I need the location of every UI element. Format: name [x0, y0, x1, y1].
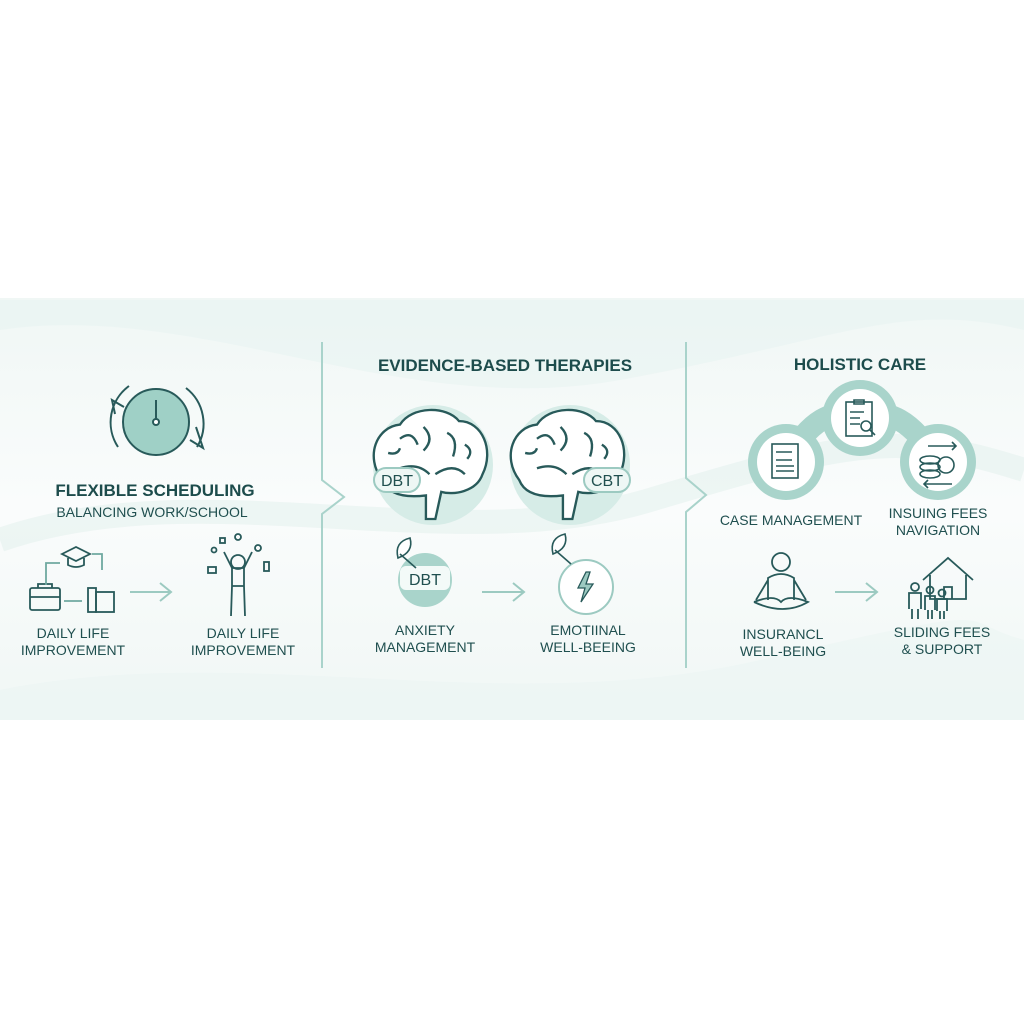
- arrow: [482, 583, 524, 601]
- label insuing fees: [889, 505, 987, 538]
- label anxiety: MANAGEMENT: [375, 639, 475, 655]
- arrow: [130, 583, 171, 601]
- arrow: [835, 583, 877, 601]
- icon: clock: [29, 385, 270, 616]
- label left: [21, 625, 125, 658]
- label insurancl: WELL-BEING: [740, 643, 826, 659]
- label right: IMPROVEMENT: [191, 642, 295, 658]
- label insuing fees: INSUING FEES: [889, 505, 987, 521]
- panel: evidence-based therapies: DBT: [409, 572, 441, 589]
- label emotional: [540, 622, 636, 655]
- label emotional: EMOTIINAL: [550, 622, 626, 638]
- icon: connected circles: [786, 414, 938, 462]
- panel: flexible scheduling: [21, 385, 295, 658]
- label left: IMPROVEMENT: [21, 642, 125, 658]
- icon: DBT circle with leaf: [398, 553, 452, 607]
- panel: evidence-based therapies: CBT: [591, 473, 623, 490]
- label right: DAILY LIFE: [207, 625, 279, 641]
- label anxiety: [375, 622, 475, 655]
- subheading: BALANCING WORK/SCHOOL: [56, 504, 248, 520]
- label emotional: WELL-BEEING: [540, 639, 636, 655]
- icon: family house: [923, 558, 973, 599]
- icon: juggling person: [231, 555, 245, 569]
- label right: [191, 625, 295, 658]
- heading: HOLISTIC CARE: [794, 355, 926, 374]
- heading: EVIDENCE-BASED THERAPIES: [378, 356, 632, 375]
- label anxiety: ANXIETY: [395, 622, 455, 638]
- label sliding fees: [894, 624, 990, 657]
- panel: holistic care: [720, 355, 990, 659]
- icon: bolt circle: [559, 560, 613, 614]
- label insuing fees: NAVIGATION: [896, 522, 980, 538]
- label left: DAILY LIFE: [37, 625, 109, 641]
- panel: evidence-based therapies: DBT: [381, 473, 413, 490]
- label insurancl: [740, 626, 826, 659]
- heading: FLEXIBLE SCHEDULING: [55, 481, 255, 500]
- icon: briefcase and books: [30, 534, 269, 616]
- label sliding fees: & SUPPORT: [902, 641, 982, 657]
- icon: brains: [373, 405, 630, 525]
- label sliding fees: SLIDING FEES: [894, 624, 990, 640]
- icon: meditation: [754, 553, 973, 619]
- panel: evidence-based therapies: [372, 356, 636, 655]
- label insurancl: INSURANCL: [743, 626, 823, 642]
- label case management: CASE MANAGEMENT: [720, 512, 862, 528]
